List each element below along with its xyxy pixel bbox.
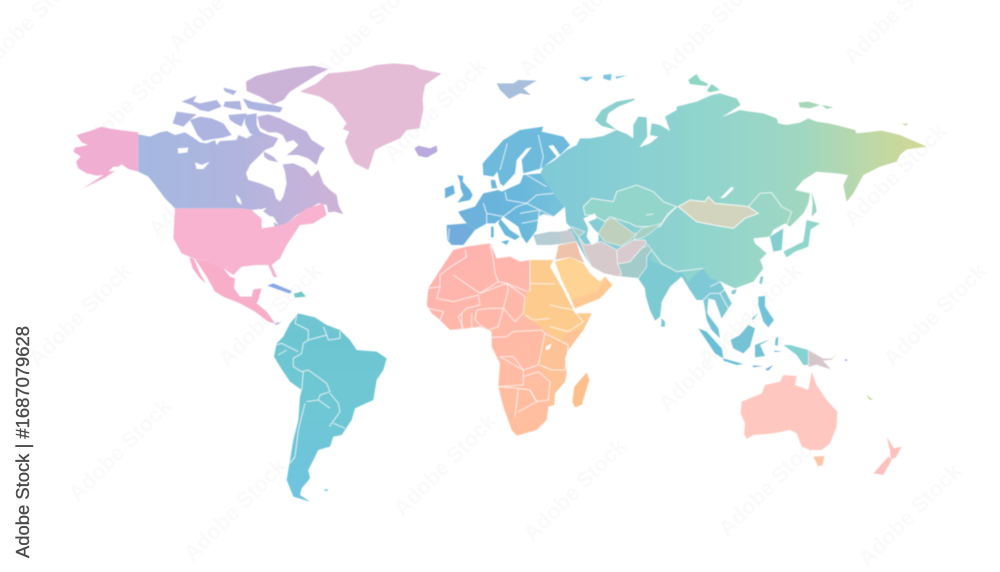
Severnaya Zemlya (688, 74, 708, 86)
Africa (427, 243, 592, 436)
Iberia (447, 223, 475, 245)
Iraq and Levant (555, 242, 585, 263)
Japan (783, 220, 820, 257)
Caspian Sea (583, 213, 598, 245)
world map (73, 63, 927, 502)
Western New Guinea (783, 345, 808, 365)
East Africa (523, 260, 592, 342)
Iran (578, 237, 622, 277)
Panama tail (267, 318, 282, 325)
Tajikistan and Kyrgyzstan (633, 223, 662, 240)
Canadian inland lakes (178, 148, 242, 205)
Afghanistan (617, 240, 647, 264)
Eastern Turkey (560, 230, 577, 244)
watermarks: Adobe Stock (838, 118, 952, 231)
Oceania and Indonesia (698, 296, 902, 475)
Falkland (323, 489, 328, 491)
Philippines (758, 296, 774, 327)
watermarks: Adobe Stock (23, 258, 137, 371)
Canada mainland (138, 131, 343, 228)
Borneo (731, 325, 755, 353)
Denmark (491, 180, 497, 188)
watermarks: Adobe Stock (178, 453, 292, 566)
watermarks: Adobe Stock (693, 258, 807, 371)
USA (173, 203, 327, 278)
Yemen and Oman (572, 277, 612, 308)
New Siberian Islands (798, 102, 820, 108)
Lesser Sunda Islands (753, 351, 783, 371)
South America (274, 313, 387, 502)
Ellesmere Island (246, 66, 328, 104)
watermarks: Adobe Stock (878, 258, 992, 371)
New Zealand south (873, 457, 892, 475)
Papua New Guinea (808, 350, 838, 370)
Wrangel Island (902, 123, 908, 126)
Turkey (533, 230, 577, 245)
watermarks: Adobe Stock (63, 393, 177, 506)
Uzbekistan and Turkmenistan (598, 218, 637, 246)
Southeast Asia (690, 268, 732, 318)
Cuba (267, 283, 292, 294)
watermarks: Adobe Stock (378, 53, 492, 166)
Russia and Asia landmass (540, 93, 927, 321)
Solomon Islands (845, 359, 848, 361)
Alaska (73, 127, 138, 189)
Franz Josef Land (578, 74, 627, 81)
Lake Victoria (546, 343, 552, 350)
Black Sea (537, 215, 572, 233)
Pakistan (617, 245, 652, 278)
Greenland (300, 63, 442, 170)
Southampton Island (264, 152, 278, 162)
Sardinia and Corsica (491, 227, 494, 237)
Mexico and Central America (195, 259, 275, 323)
watermarks: Adobe Stock (518, 433, 632, 546)
watermarks: Adobe Stock (388, 408, 502, 521)
Malay Peninsula (705, 308, 720, 338)
Sakhalin (812, 192, 817, 217)
Iceland (414, 146, 437, 158)
South America borders (275, 316, 345, 463)
Madagascar (572, 373, 589, 407)
Sri Lanka (661, 318, 665, 327)
Kazakhstan (583, 185, 677, 227)
watermarks: Adobe Stock (653, 303, 767, 416)
Ireland (445, 185, 455, 198)
Mongolia (678, 197, 758, 228)
North America and Greenland (73, 63, 442, 325)
New Caledonia (866, 395, 873, 400)
Small arctic islets (822, 105, 833, 109)
Java (723, 358, 743, 365)
Taiwan (759, 277, 763, 284)
Southeast Africa (538, 330, 583, 407)
Australia (741, 372, 837, 450)
watermarks: Adobe Stock (143, 128, 257, 241)
Great Britain (457, 175, 473, 203)
Hispaniola (294, 292, 306, 298)
Tasmania (813, 456, 824, 467)
Italy (498, 218, 520, 240)
Great Lakes (253, 208, 278, 229)
watermarks: Adobe Stock (853, 458, 967, 571)
Palawan (752, 313, 758, 320)
Sumatra (698, 328, 723, 358)
Caucasus (572, 227, 585, 237)
Africa borders (428, 245, 583, 417)
Europe borders (448, 135, 553, 240)
watermarks: Adobe Stock (73, 46, 187, 159)
New Zealand north (887, 437, 902, 459)
Halmahera (775, 337, 778, 346)
Novaya Zemlya (595, 98, 635, 130)
Lake Baikal (720, 187, 734, 198)
Arabian Peninsula (555, 257, 612, 308)
Europe (445, 127, 570, 245)
Baja California (189, 258, 206, 283)
Baffin Island (257, 114, 325, 165)
Korea (770, 228, 783, 252)
Svalbard (497, 80, 537, 99)
watermarks: Adobe Stock (213, 258, 327, 371)
Arctic islands (173, 88, 283, 141)
Scandinavia (483, 127, 570, 186)
Sicily (501, 240, 509, 245)
Sulawesi (755, 339, 770, 357)
Asia borders (646, 193, 792, 308)
watermarks: Adobe Stock (713, 428, 827, 541)
India (638, 250, 707, 321)
October Islands (707, 84, 720, 92)
Eurasia (497, 74, 927, 327)
Baltic and Central Europe (458, 173, 565, 243)
stock credit: Adobe Stock | #1687079628 (13, 326, 33, 558)
Hainan (732, 289, 737, 294)
